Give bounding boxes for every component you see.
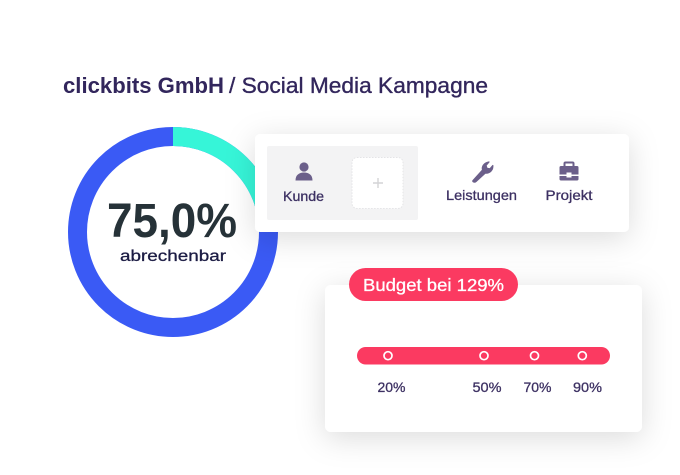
scale labels: 70%	[524, 379, 552, 395]
marker 50%	[480, 352, 488, 360]
progress bar	[357, 347, 610, 364]
panel: tabs card	[255, 134, 629, 232]
scale labels	[378, 379, 602, 395]
tab label: Kunde: Kunde	[283, 188, 324, 204]
donut label: abrechenbar	[120, 248, 227, 265]
icon: person	[296, 162, 312, 180]
title: / Social Media Kampagne	[229, 73, 488, 98]
icon: wrench	[473, 162, 493, 182]
scale labels: 50%	[472, 379, 502, 395]
add placeholder box	[352, 158, 403, 208]
tab label: Projekt: Projekt	[546, 187, 593, 203]
marker 90%	[578, 352, 586, 360]
donut value: 75,0%	[107, 195, 237, 248]
icon: briefcase	[560, 162, 578, 180]
title	[63, 73, 488, 98]
budget pill: Budget bei 129%	[363, 275, 504, 295]
scale labels: 90%	[573, 379, 602, 395]
title: clickbits GmbH	[63, 73, 224, 98]
marker 70%	[530, 352, 538, 360]
marker 20%	[384, 352, 392, 360]
tab label: Leistungen: Leistungen	[446, 187, 517, 203]
panel: budget card	[325, 268, 642, 432]
active tab background	[267, 146, 418, 220]
budget pill	[349, 268, 518, 301]
donut chart: 75% abrechenbar	[78, 136, 268, 328]
scale labels: 20%	[378, 379, 406, 395]
